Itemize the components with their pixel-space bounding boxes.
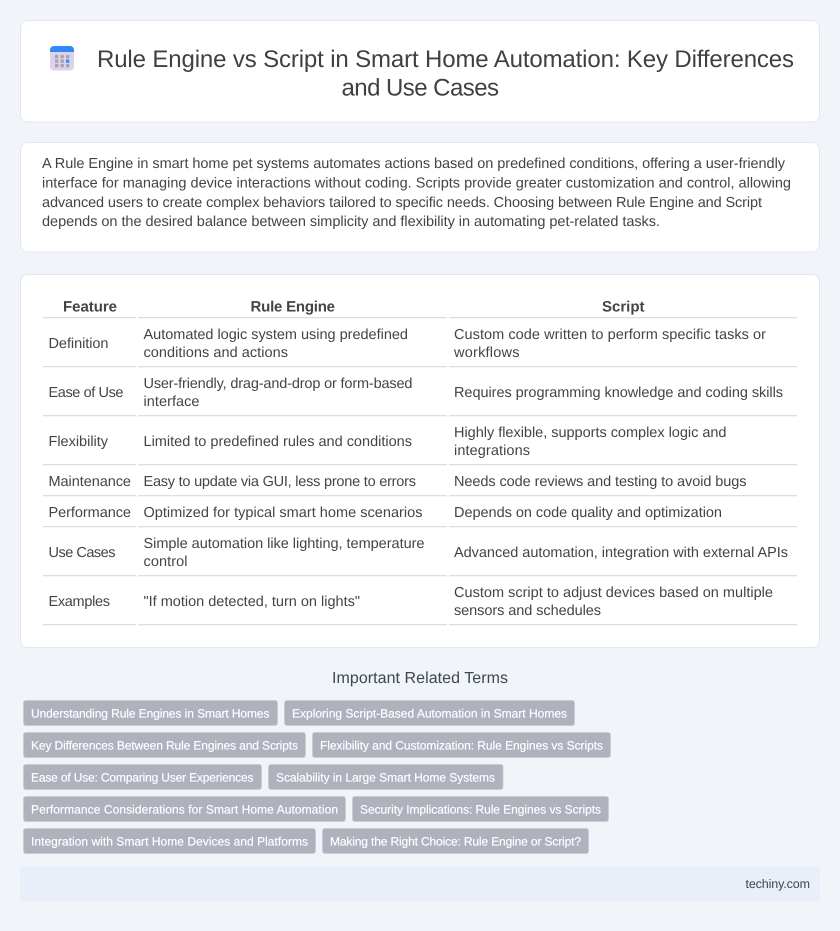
tag (268, 764, 503, 790)
tag (24, 732, 306, 758)
table header: Script (602, 298, 644, 316)
tag: Key Differences Between Rule Engines and Scripts (31, 738, 298, 752)
footer: techiny.com (746, 877, 810, 891)
tag: Integration with Smart Home Devices and Platforms (31, 834, 308, 848)
summary paragraph: advanced users to create complex behaviors tailored to specific needs. Choosing between Rule Engine and Script (42, 195, 762, 211)
row: performance: Optimized for typical smart home scenarios (144, 505, 422, 521)
heading: related terms: Important Related Terms (332, 670, 508, 687)
summary paragraph: A Rule Engine in smart home pet systems automates actions based on predefined conditions, offering a user-friendly (42, 156, 786, 172)
row: definition: Custom code written to perform specific tasks or (454, 327, 766, 343)
row: use cases: Use Cases (48, 545, 116, 561)
row: examples: Examples (48, 594, 110, 610)
table header (63, 298, 644, 316)
title: Rule Engine vs Script in Smart Home Automation: Key Differences (97, 46, 794, 73)
tag: Scalability in Large Smart Home Systems (276, 770, 495, 784)
row: ease of use: Ease of Use (48, 385, 124, 401)
table header: Feature (63, 298, 117, 316)
tags: related terms (24, 700, 610, 854)
tag (24, 796, 346, 822)
row: use cases (48, 536, 788, 570)
row: examples: "If motion detected, turn on lights" (144, 594, 360, 610)
footer (20, 867, 820, 901)
table header: Rule Engine (250, 298, 335, 316)
row: examples (48, 585, 773, 619)
row: ease of use: Requires programming knowledge and coding skills (454, 385, 783, 401)
row: use cases: Advanced automation, integration with external APIs (454, 545, 788, 561)
row: examples: Custom script to adjust devices based on multiple (454, 585, 773, 601)
row: maintenance: Needs code reviews and testing to avoid bugs (454, 474, 746, 490)
row: definition: conditions and actions (144, 345, 288, 361)
row: performance: Depends on code quality and optimization (454, 505, 722, 521)
tag: Exploring Script-Based Automation in Smart Homes (292, 706, 567, 720)
row: examples: sensors and schedules (454, 603, 601, 619)
row: definition (48, 327, 766, 361)
summary paragraph: depends on the desired balance between simplicity and flexibility in automating pet-related tasks. (42, 214, 660, 230)
row: flexibility: integrations (454, 443, 530, 459)
tag: Security Implications: Rule Engines vs Scripts (360, 802, 601, 816)
tag: Performance Considerations for Smart Home Automation (31, 802, 338, 816)
title (97, 46, 794, 102)
row: ease of use: interface (144, 394, 200, 410)
row: definition: Automated logic system using predefined (144, 327, 408, 343)
row: maintenance (48, 474, 746, 490)
tag: Understanding Rule Engines in Smart Homes (31, 706, 270, 720)
row: flexibility (48, 425, 726, 459)
icon: calendar (50, 46, 74, 70)
title: and Use Cases (342, 74, 499, 102)
row: use cases: control (144, 554, 188, 570)
tag: Making the Right Choice: Rule Engine or Script? (330, 834, 581, 848)
tag: Flexibility and Customization: Rule Engines vs Scripts (320, 738, 603, 752)
panel: comparison table (20, 274, 820, 648)
row: maintenance: Easy to update via GUI, less prone to errors (144, 474, 416, 490)
panel: title card (20, 20, 820, 122)
summary paragraph: interface for managing device interactions without coding. Scripts provide greater customization and control, allowing (42, 176, 791, 192)
tag (24, 764, 262, 790)
row: definition: Definition (48, 336, 108, 352)
row: use cases: Simple automation like lighting, temperature (144, 536, 424, 552)
row: flexibility: Highly flexible, supports complex logic and (454, 425, 726, 441)
row: flexibility: Flexibility (48, 434, 109, 450)
tag (284, 700, 574, 726)
row: performance: Performance (48, 505, 131, 521)
panel: summary (20, 142, 820, 252)
row: definition: workflows (453, 345, 520, 361)
tag: Ease of Use: Comparing User Experiences (31, 770, 254, 784)
row: ease of use (48, 376, 783, 410)
tag (352, 796, 608, 822)
row: ease of use: User-friendly, drag-and-drop or form-based (144, 376, 412, 392)
tag (322, 828, 588, 854)
row: performance (48, 505, 722, 521)
tag (24, 828, 316, 854)
summary paragraph (42, 156, 791, 230)
tag (312, 732, 610, 758)
row: flexibility: Limited to predefined rules and conditions (144, 434, 412, 450)
tag (24, 700, 278, 726)
row: maintenance: Maintenance (48, 474, 131, 490)
